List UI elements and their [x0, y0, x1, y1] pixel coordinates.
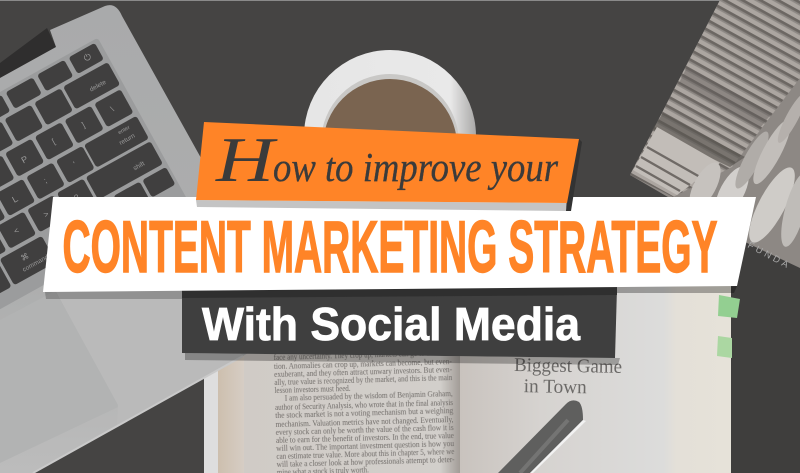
cover lettering: FUNDA: [746, 240, 793, 272]
white banner shadow: [45, 290, 182, 299]
book page body text: can estimate true value. More about this in chapter 5, where we: [276, 447, 455, 461]
key labels: >: [42, 209, 51, 219]
home row: [0, 116, 149, 233]
light stone block: [633, 127, 720, 195]
key labels: ]: [80, 121, 87, 130]
key labels: shift: [132, 160, 146, 172]
script heading: [215, 124, 559, 195]
book page title: Biggest Game: [514, 355, 622, 378]
key labels: [: [50, 137, 57, 146]
keyboard: [0, 38, 190, 417]
photo: coffee cup: [304, 50, 476, 222]
key labels: <: [12, 226, 21, 236]
subheading: With Social Media: [202, 298, 580, 350]
key labels: return: [118, 132, 137, 147]
key labels: delete: [89, 79, 108, 94]
banner: Content Marketing Strategy: [43, 197, 756, 292]
banner: How to improve your: [196, 122, 579, 203]
book page body text: [274, 348, 455, 473]
key labels: ': [72, 160, 78, 169]
book page body text: face any uncertainty. They crop up, markets can go to extremes: [274, 348, 452, 362]
shift row: [0, 141, 163, 265]
key labels: enter: [117, 125, 131, 136]
key labels: ⌘: [19, 251, 31, 263]
function row: [0, 43, 104, 126]
key labels: L: [10, 194, 20, 205]
top letter row: [0, 89, 134, 193]
pen: [498, 400, 586, 473]
photo: laptop: [0, 5, 295, 473]
number row: [0, 62, 120, 175]
book page body text: will take a closer look at how professionals attempt to deter-: [277, 455, 455, 469]
key labels: ;: [42, 176, 49, 185]
banner: With Social Media: [182, 286, 620, 365]
column capitals: [683, 90, 800, 249]
book page body text: ally, true value is recognized by the market, and this is the main: [274, 373, 452, 387]
key labels: \: [109, 104, 116, 114]
book cover strip: [731, 243, 800, 473]
green bookmark tabs: [717, 295, 740, 358]
heading ribbon shadow: [196, 139, 582, 211]
photo: architecture book: [630, 0, 800, 473]
book page body text: tion. Anomalies can crop up, markets can become, but even-: [274, 357, 452, 371]
book page title: [514, 355, 622, 399]
key labels: P: [19, 154, 30, 165]
key labels: ?: [73, 192, 81, 203]
key labels: [0, 51, 168, 274]
book page body text: author of Security Analysis, who wrote that in the final analysis: [275, 398, 453, 412]
book page body text: able to earn for the benefit of investors. In the end, true value: [276, 431, 454, 445]
book page body text: the stock market is not a voting mechanism but a weighing: [275, 406, 453, 420]
book page body text: exuberant, and they often attract unwary investors. But even-: [274, 365, 452, 379]
column fluting: [630, 0, 800, 197]
book page body text: will win out. The important investment question is how you: [276, 439, 454, 453]
bottom row: [0, 167, 180, 303]
photo: open book: [204, 280, 731, 473]
key labels: ⏻: [82, 51, 93, 63]
book page title: in Town: [524, 376, 587, 398]
book page body text: lesson investors must heed.: [274, 384, 351, 395]
book page body text: I am also persuaded by the wisdom of Benjamin Graham,: [285, 389, 453, 403]
script heading: H: [215, 124, 279, 195]
key labels: command: [22, 254, 50, 274]
book page body text: every stock can only be worth the value of the cash flow it is: [276, 423, 454, 437]
script heading: ow to improve your: [273, 144, 559, 190]
book page body text: mechanism. Valuation metrics have not changed. Eventually,: [275, 415, 454, 429]
